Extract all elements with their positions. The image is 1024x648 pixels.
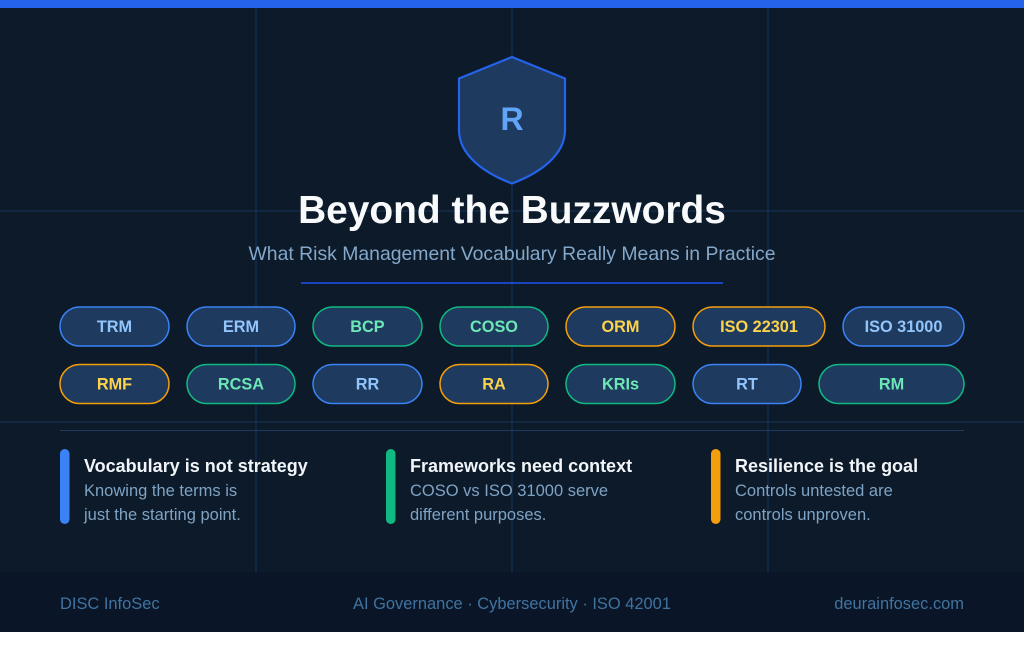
- title: Beyond the Buzzwords: [298, 189, 726, 232]
- pill: TRM: [60, 307, 169, 346]
- icon: shield with R: R: [500, 101, 524, 137]
- term pills row 2: [60, 364, 964, 404]
- pill: TRM: TRM: [97, 318, 132, 336]
- pill: RT: [693, 364, 801, 404]
- body text: Controls untested are: [735, 482, 893, 500]
- pill: ORM: ORM: [602, 318, 639, 336]
- pill: KRIs: [566, 364, 675, 404]
- pill: ERM: [187, 307, 295, 346]
- takeaway: frameworks: [386, 449, 632, 524]
- pill: RA: RA: [482, 376, 506, 394]
- pill: ISO 31000: ISO 31000: [865, 318, 942, 336]
- body text: Knowing the terms is: [84, 482, 237, 500]
- pill: RR: [313, 364, 422, 404]
- pill: COSO: COSO: [470, 318, 518, 336]
- footer: topics: AI Governance · Cybersecurity · ISO 42001: [353, 595, 671, 613]
- body text: COSO vs ISO 31000 serve: [410, 482, 608, 500]
- body text: just the starting point.: [83, 506, 241, 524]
- heading: Resilience is the goal: [735, 456, 918, 476]
- takeaway: vocabulary: [60, 449, 308, 524]
- pill: KRIs: KRIs: [602, 376, 639, 394]
- footer: [0, 572, 1024, 632]
- footer: website: deurainfosec.com: [834, 595, 964, 613]
- pill: RMF: RMF: [97, 376, 132, 394]
- pill: COSO: [440, 307, 548, 346]
- pill: ORM: [566, 307, 675, 346]
- pill: RA: [440, 364, 548, 404]
- accent bar: green: [386, 449, 396, 524]
- takeaway: resilience: [711, 449, 918, 524]
- pill: RM: RM: [879, 376, 904, 394]
- pill: BCP: [313, 307, 422, 346]
- accent bar: amber: [711, 449, 720, 524]
- icon: shield with R: [459, 57, 565, 184]
- heading: Vocabulary is not strategy: [84, 456, 308, 476]
- pill: ISO 31000: [843, 307, 964, 346]
- body text: controls unproven.: [735, 506, 871, 524]
- body text: different purposes.: [410, 506, 546, 524]
- footer: brand: DISC InfoSec: [60, 595, 160, 613]
- accent bar: blue: [60, 449, 70, 524]
- pill: ISO 22301: ISO 22301: [720, 318, 798, 336]
- pill: ERM: ERM: [223, 318, 259, 336]
- subtitle: What Risk Management Vocabulary Really Means in Practice: [248, 243, 776, 265]
- heading: Frameworks need context: [410, 456, 632, 476]
- top accent bar: [0, 0, 1024, 8]
- term pills row 1: [60, 307, 964, 346]
- pill: RCSA: RCSA: [218, 376, 264, 394]
- pill: ISO 22301: [693, 307, 825, 346]
- pill: BCP: BCP: [350, 318, 385, 336]
- pill: RR: RR: [356, 376, 380, 394]
- pill: RT: RT: [736, 376, 758, 394]
- pill: RMF: [60, 364, 169, 404]
- pill: RCSA: [187, 364, 295, 404]
- pill: RM: [819, 364, 964, 404]
